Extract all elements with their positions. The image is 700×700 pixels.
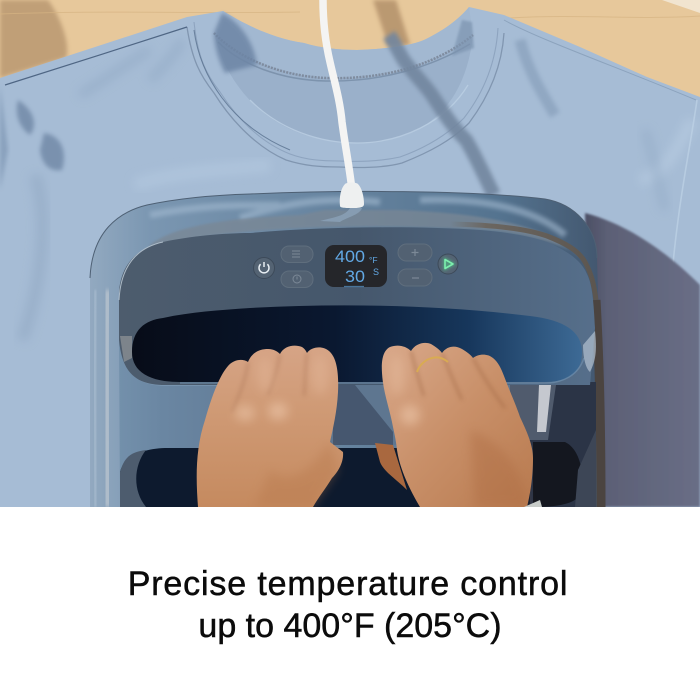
lower handle slot: [120, 448, 530, 507]
LCD display: [325, 245, 387, 287]
translucent shell: [90, 191, 604, 507]
LCD display: S: [373, 267, 379, 277]
collar stitching: [187, 27, 504, 168]
shadow inside collar: [214, 13, 257, 73]
cable shadow on shirt: [389, 35, 494, 195]
bar shaded centre: [333, 385, 393, 445]
caption: Precise temperature control: [128, 565, 568, 603]
start button: [438, 254, 458, 274]
control buttons and display: [254, 244, 458, 288]
LCD display: °F: [369, 255, 378, 265]
lower right slot: [533, 442, 582, 507]
shoulder seams: [5, 27, 187, 85]
fold shadows: [17, 100, 64, 170]
neck band stitching: [214, 33, 473, 78]
bar highlight on the right: [510, 385, 556, 440]
power cord: [323, 0, 364, 208]
right hand: [375, 343, 533, 507]
caption: [128, 565, 568, 645]
cable exit reflection on lid: [320, 208, 362, 222]
caption: up to 400°F (205°C): [198, 607, 502, 645]
timer button: [281, 271, 313, 288]
steam mode button: [281, 246, 313, 262]
power button: [254, 258, 274, 278]
minus button: [398, 269, 432, 286]
LCD display: 30: [345, 267, 365, 286]
lower right body: [530, 382, 596, 507]
upper handle slot: [132, 305, 582, 382]
finger creases and knuckles: [232, 353, 307, 412]
product photo scene: [0, 0, 700, 507]
LCD display: 400: [335, 247, 365, 266]
back neck band: [223, 7, 469, 55]
plus button: [398, 244, 432, 261]
brown rim band: [450, 224, 596, 300]
bar middle section: [356, 385, 510, 445]
control panel top surface: [119, 227, 595, 385]
watch strap glimpse: [524, 500, 542, 507]
finger creases and knuckles: [411, 351, 505, 408]
wooden table background: [0, 0, 700, 97]
upper band between shell and panel: [150, 210, 567, 249]
inside back of shirt: [230, 49, 470, 142]
t-shirt: [0, 7, 700, 507]
heat press shadow on shirt: [585, 213, 700, 507]
slot right highlight: [583, 331, 596, 372]
heat press: [90, 191, 604, 507]
left hand: [197, 346, 343, 507]
shell reflections: [150, 200, 565, 235]
gold ring: [417, 357, 448, 372]
handle surface bar: [119, 342, 216, 471]
